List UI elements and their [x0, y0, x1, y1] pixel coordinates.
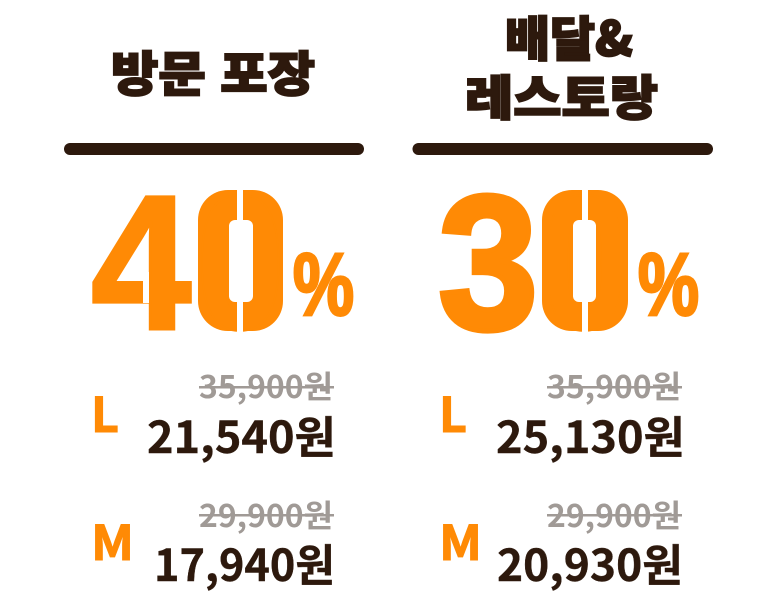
- price row: size L: [439, 362, 685, 466]
- discount: 40%: 4: [91, 156, 191, 370]
- price row: size L: 25,130원: [496, 402, 685, 466]
- discount: 40%: %: [293, 235, 354, 334]
- discount: 40%: [91, 155, 354, 370]
- heading: delivery and restaurant: 배달&: [505, 0, 633, 70]
- divider bar: delivery and restaurant: [412, 143, 713, 155]
- price row: size L: [91, 362, 336, 466]
- divider bar: pickup: [64, 143, 364, 155]
- panel: delivery and restaurant discount: [412, 0, 713, 592]
- price row: size M: [91, 491, 335, 592]
- price row: size L: 35,900원: [199, 362, 333, 407]
- price row: size L: L: [439, 376, 467, 446]
- price row: size M: [439, 491, 683, 592]
- discount: 30%: [438, 155, 699, 370]
- price row: size M: M: [91, 504, 134, 574]
- discount: 30%: %: [638, 235, 699, 334]
- price row: size M: 29,900원: [199, 491, 333, 536]
- price row: size M: M: [439, 504, 482, 574]
- heading: delivery and restaurant: [465, 0, 658, 129]
- discount: 40%: 0: [196, 155, 285, 370]
- price row: size L: L: [91, 376, 119, 446]
- price row: size L: 35,900원: [547, 362, 681, 407]
- heading: pickup: 방문 포장: [111, 35, 315, 105]
- price row: size M: 29,900원: [547, 491, 681, 536]
- discount: 30%: 0: [540, 155, 630, 370]
- price row: size L: 21,540원: [147, 402, 336, 466]
- heading: delivery and restaurant: 레스토랑: [465, 59, 658, 129]
- discount: 30%: 3: [438, 156, 538, 370]
- panel: pickup discount: [64, 35, 364, 592]
